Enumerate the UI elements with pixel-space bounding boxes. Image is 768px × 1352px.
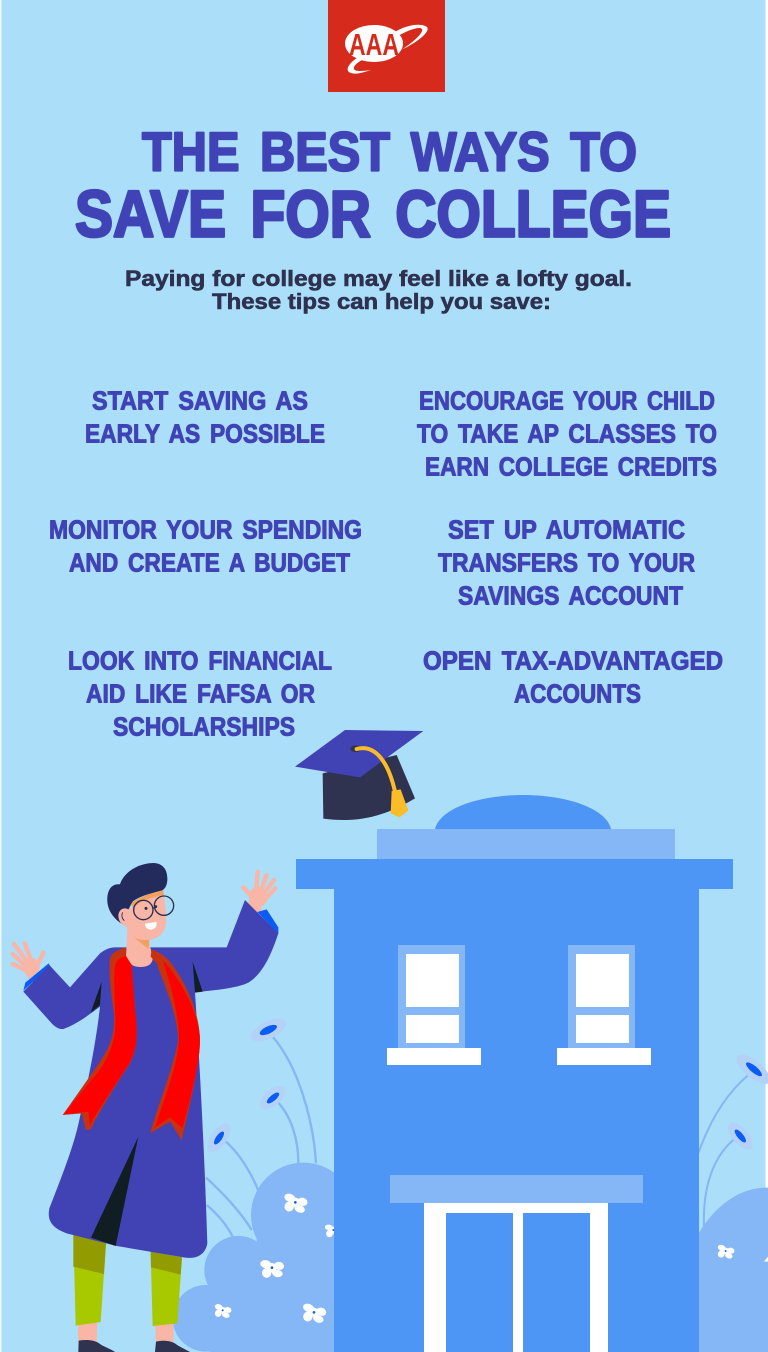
eyes — [144, 907, 147, 910]
tip: automatic transfers: SAVINGS ACCOUNT — [458, 580, 683, 610]
left window — [387, 945, 481, 1065]
AAA logo: AAA — [349, 27, 399, 62]
building roof band — [296, 859, 733, 889]
icon: white blossoms — [212, 1192, 342, 1327]
tip: financial aid: SCHOLARSHIPS — [113, 712, 295, 742]
building dome — [435, 795, 611, 829]
tip: tax-advantaged accounts — [423, 646, 723, 708]
title: SAVE FOR COLLEGE — [75, 176, 671, 250]
tip: financial aid: LOOK INTO FINANCIAL — [68, 646, 332, 676]
AAA logo — [328, 0, 445, 92]
forehead shadow — [131, 888, 164, 908]
tip: start saving early: START SAVING AS — [92, 386, 308, 416]
graduate head — [107, 863, 174, 940]
glasses — [134, 896, 174, 920]
door canopy — [390, 1175, 643, 1203]
building body — [334, 889, 699, 1352]
tip: automatic transfers: SET UP AUTOMATIC — [448, 514, 685, 544]
robe — [23, 900, 278, 1258]
graduate character — [13, 872, 278, 1352]
face — [127, 890, 166, 940]
left flower stems and blooms — [203, 1014, 316, 1237]
ear — [118, 908, 129, 927]
subtitle text: These tips can help you save: — [212, 289, 551, 314]
tip: AP classes: ENCOURAGE YOUR CHILD — [419, 386, 715, 416]
tip: tax-advantaged accounts: OPEN TAX-ADVANTAGED — [423, 646, 723, 676]
cuffs — [23, 963, 50, 991]
left bush — [173, 1163, 356, 1352]
scarf right — [150, 949, 200, 1140]
tip: financial aid — [68, 646, 332, 742]
title — [75, 120, 671, 250]
tip: financial aid: AID LIKE FAFSA OR — [86, 678, 315, 708]
tip: automatic transfers — [438, 514, 695, 610]
building upper band — [377, 829, 675, 859]
building — [296, 795, 733, 1352]
tip: AP classes: EARN COLLEGE CREDITS — [425, 452, 717, 482]
subtitle text — [125, 266, 632, 314]
mouth — [145, 922, 157, 930]
title: THE BEST WAYS TO — [142, 120, 637, 182]
tip: budget — [49, 514, 362, 578]
robe shadows — [91, 982, 102, 1013]
tip: budget: AND CREATE A BUDGET — [69, 548, 350, 578]
tip: start saving early: EARLY AS POSSIBLE — [85, 418, 325, 448]
right flowers and bush — [697, 1049, 768, 1352]
icon: graduation cap — [295, 730, 423, 820]
legs — [73, 1233, 190, 1352]
tip: AP classes: TO TAKE AP CLASSES TO — [417, 418, 717, 448]
tip: start saving early — [85, 386, 325, 448]
tip: automatic transfers: TRANSFERS TO YOUR — [438, 548, 695, 578]
tip: tax-advantaged accounts: ACCOUNTS — [514, 678, 641, 708]
left hand — [13, 943, 43, 978]
tip: AP classes — [417, 386, 717, 482]
tip: budget: MONITOR YOUR SPENDING — [49, 514, 362, 544]
scarf left — [63, 947, 137, 1130]
hair — [107, 863, 167, 927]
subtitle text: Paying for college may feel like a lofty goal. — [125, 266, 632, 291]
neck — [126, 930, 153, 967]
door — [424, 1203, 608, 1352]
right hand — [243, 872, 275, 910]
right window — [557, 945, 651, 1065]
